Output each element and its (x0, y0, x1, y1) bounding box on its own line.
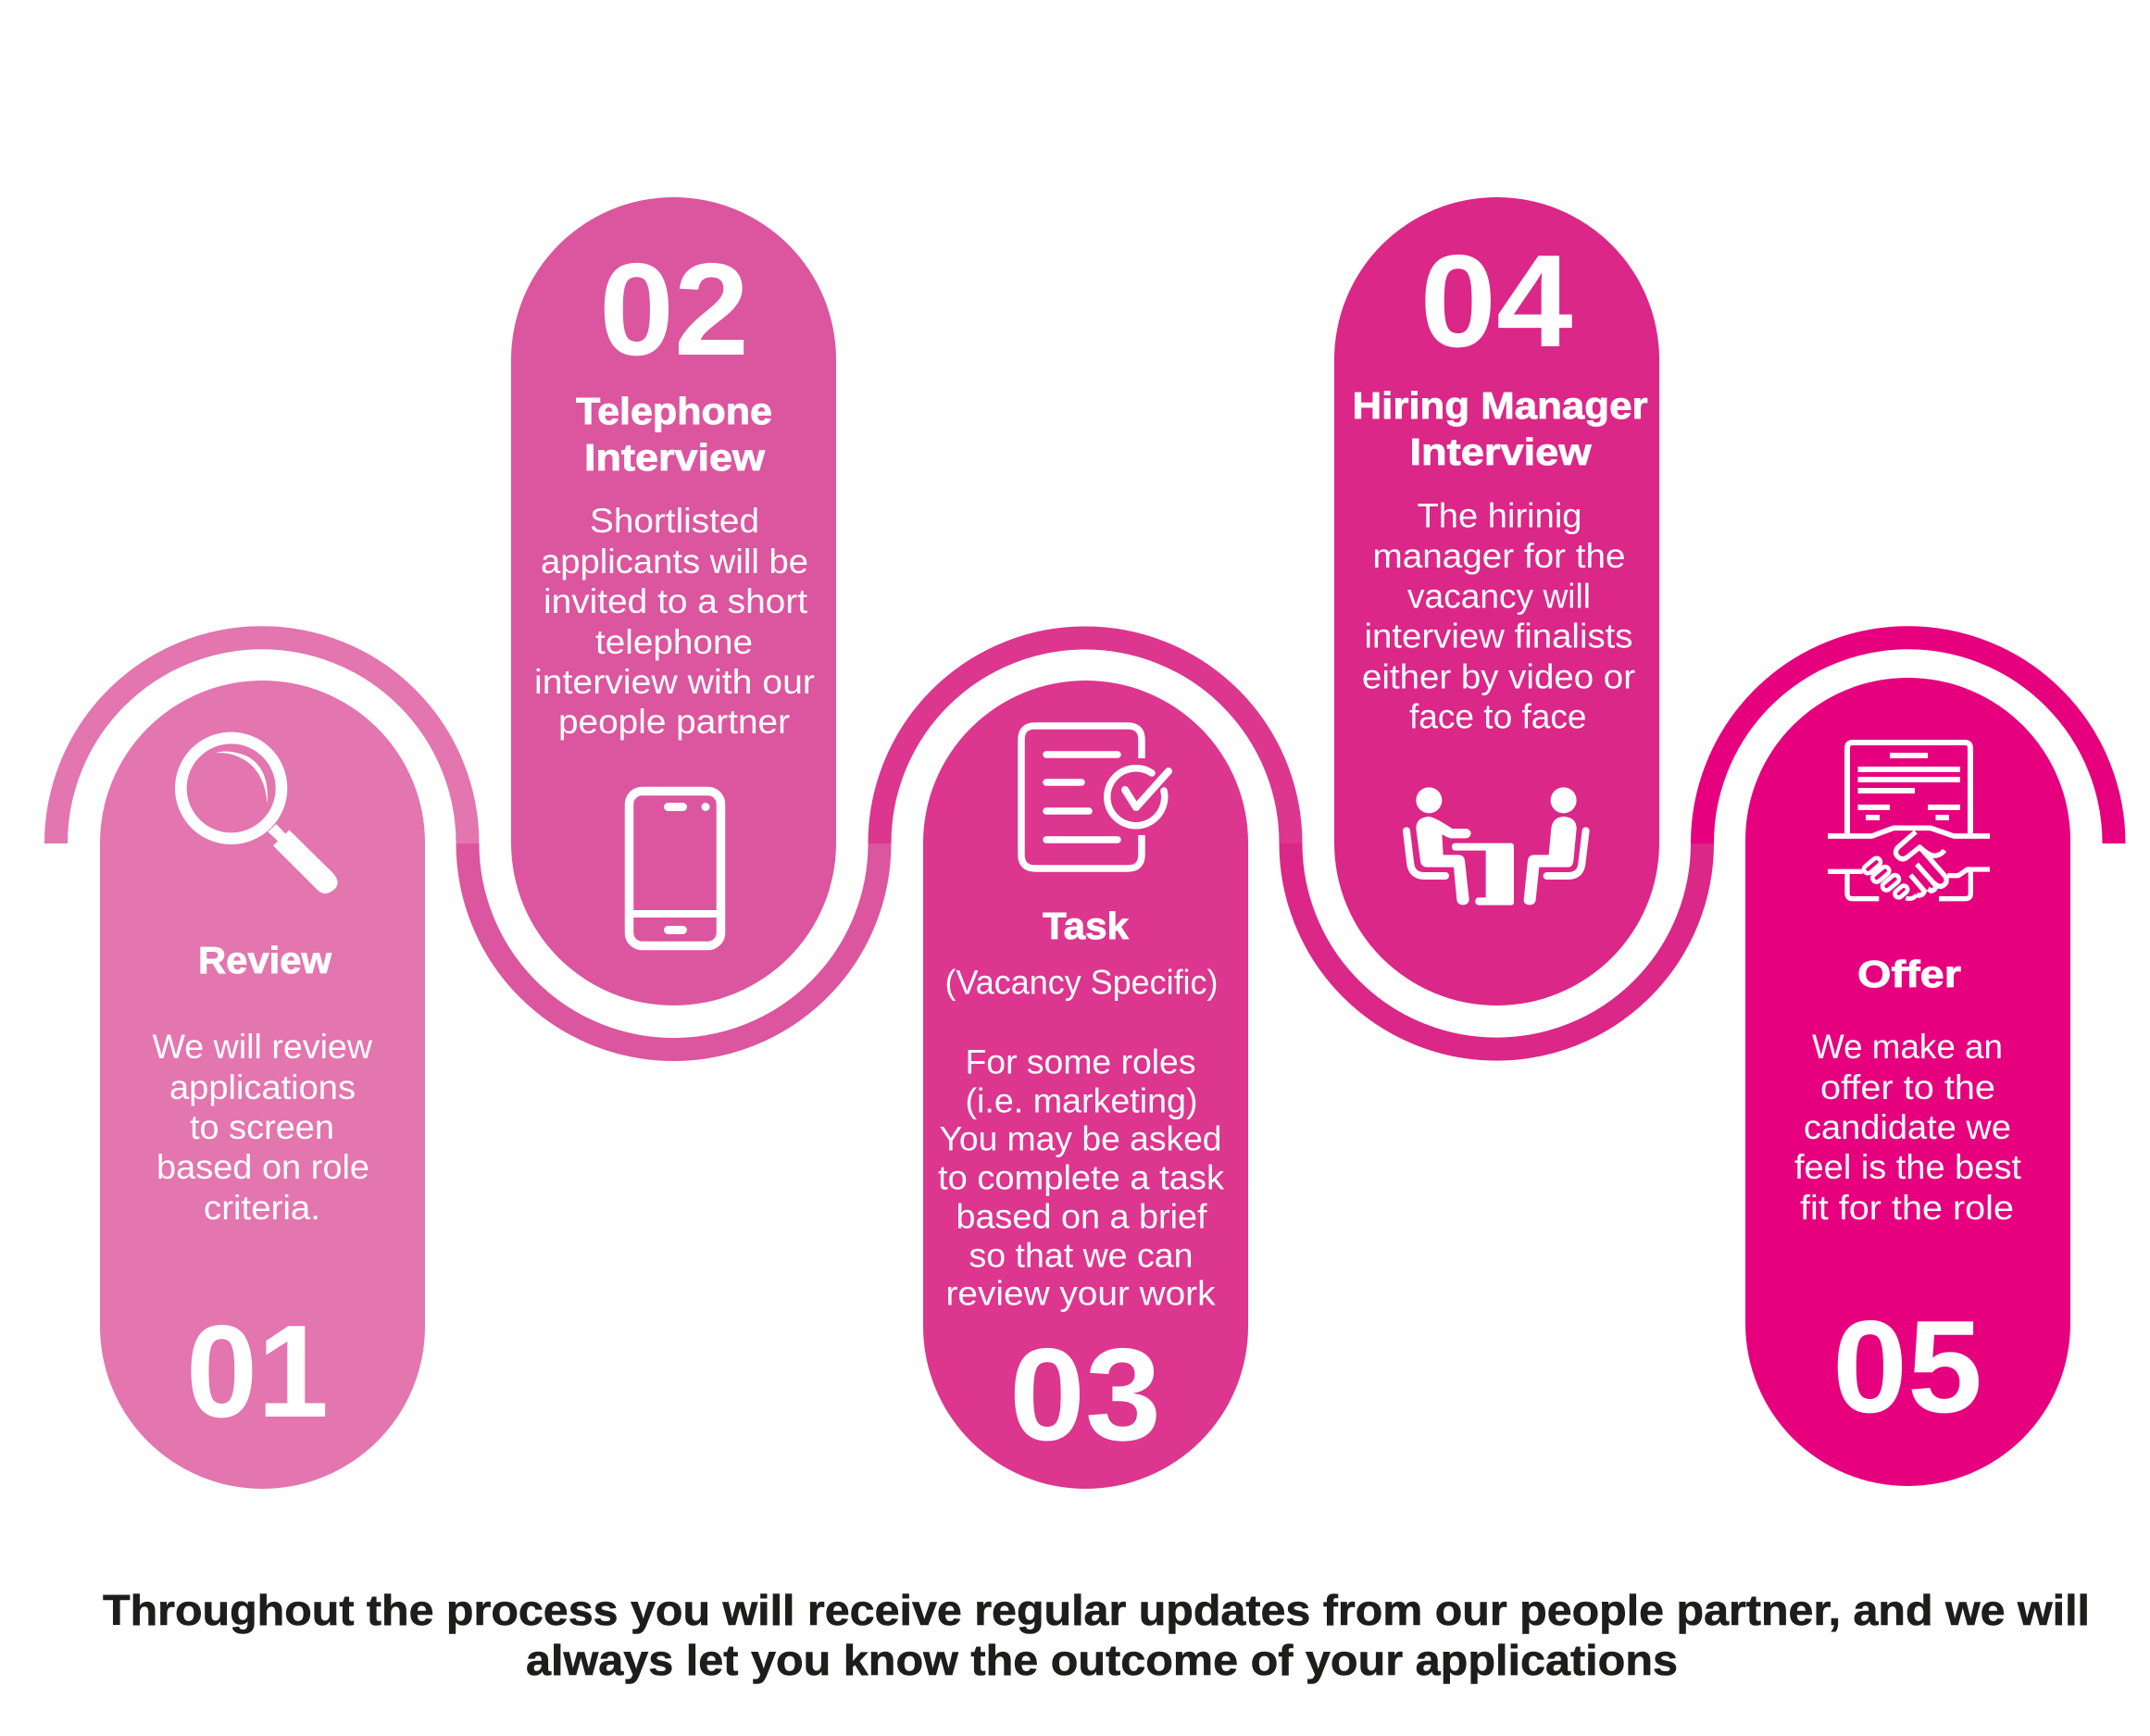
text block: step 5 description: fit for the role (1800, 1189, 2014, 1227)
text block: step 4 description: either by video or (1362, 657, 1635, 696)
footer statement: always let you know the outcome of your applications (526, 1636, 1678, 1684)
panel: step 5 offer (1745, 678, 2070, 1486)
panel: step 4 hiring manager interview (1334, 197, 1659, 1005)
icon: handshake (1828, 828, 1990, 899)
text block: step 1 description (152, 1028, 372, 1227)
text block: step 2 description (534, 502, 815, 741)
number 05: 05 (1832, 1293, 1982, 1441)
text block: step 5 description: We make an (1812, 1028, 2003, 1066)
pill background 1 (100, 681, 425, 1489)
footer statement: Throughout the process you will receive regular updates from our people partner, and we will (103, 1586, 2090, 1634)
text block: step 5 description: candidate we (1804, 1108, 2011, 1146)
text block: step 1 description: applications (169, 1068, 356, 1106)
text block: step 5 description (1794, 1028, 2022, 1227)
icon: two people at a desk (1406, 787, 1586, 905)
text block: step 2 description: invited to a short (544, 582, 808, 620)
heading: Hiring Manager Interview: Interview (1409, 431, 1592, 473)
panel: step 1 review (100, 681, 425, 1489)
icon: mobile phone (630, 791, 720, 946)
heading: Hiring Manager Interview (1352, 384, 1648, 473)
icon: magnifying glass (181, 738, 338, 893)
icon: contract document (1847, 743, 1970, 833)
text block: step 4 description: face to face (1409, 698, 1587, 735)
text block: step 3 description: For some roles (965, 1043, 1196, 1081)
connector arc over step 5 (1702, 638, 2114, 843)
heading: Hiring Manager Interview: Hiring Manager (1352, 384, 1648, 427)
text block: step 2 description: interview with our (534, 663, 815, 701)
number 04: 04 (1420, 228, 1573, 375)
text block: step 1 description: We will review (152, 1028, 372, 1066)
text block: step 3 description: You may be asked (939, 1120, 1222, 1157)
text block: step 2 description: people partner (558, 703, 790, 741)
text block: step 3 description: review your work (946, 1274, 1216, 1313)
text block: step 2 description: applicants will be (541, 543, 808, 581)
connector arc over step 1 (56, 638, 468, 843)
text block: step 1 description: to screen (190, 1108, 334, 1146)
pill background 4 (1334, 197, 1659, 1005)
text block: step 2 description: Shortlisted (590, 502, 759, 540)
heading: Telephone Interview: Telephone (576, 390, 772, 432)
text block: vacancy specific: (Vacancy Specific) (944, 963, 1219, 1002)
pill background 5 (1745, 678, 2070, 1486)
pill background 2 (511, 197, 836, 1005)
connector arc under step 2 (468, 843, 880, 1050)
text block: step 4 description (1362, 496, 1635, 735)
heading: Offer: Offer (1857, 953, 1961, 995)
heading: Task: Task (1043, 905, 1129, 947)
heading: Telephone Interview: Interview (584, 436, 765, 479)
connector arc under step 4 (1291, 843, 1702, 1049)
text block: step 4 description: The hirinig (1417, 496, 1581, 535)
text block: step 4 description: vacancy will (1407, 578, 1591, 615)
number 01: 01 (186, 1298, 329, 1445)
heading: Telephone Interview (576, 390, 772, 479)
text block: step 4 description: manager for the (1372, 537, 1626, 575)
number 02: 02 (599, 236, 749, 383)
text block: step 1 description: based on role (156, 1148, 369, 1186)
text block: step 3 description: (i.e. marketing) (965, 1081, 1198, 1120)
text block: step 3 description: based on a brief (956, 1198, 1207, 1235)
text block: step 5 description: feel is the best (1794, 1148, 2022, 1186)
panel: step 2 telephone interview (511, 197, 836, 1005)
text block: step 3 description: so that we can (969, 1237, 1193, 1274)
pill background 3 (923, 681, 1248, 1489)
text block: step 3 description (938, 1043, 1225, 1313)
text block: step 5 description: offer to the (1820, 1068, 1995, 1106)
text block: step 4 description: interview finalists (1365, 617, 1633, 656)
text block: step 1 description: criteria. (204, 1189, 320, 1227)
heading: Review: Review (198, 939, 331, 981)
connector arc over step 3 (880, 638, 1291, 843)
panel: step 3 task (923, 681, 1248, 1489)
number 03: 03 (1009, 1321, 1161, 1468)
text block: step 3 description: to complete a task (938, 1159, 1225, 1196)
text block: step 2 description: telephone (595, 623, 753, 661)
icon: checklist document (1021, 726, 1169, 868)
footer statement (103, 1586, 2090, 1684)
